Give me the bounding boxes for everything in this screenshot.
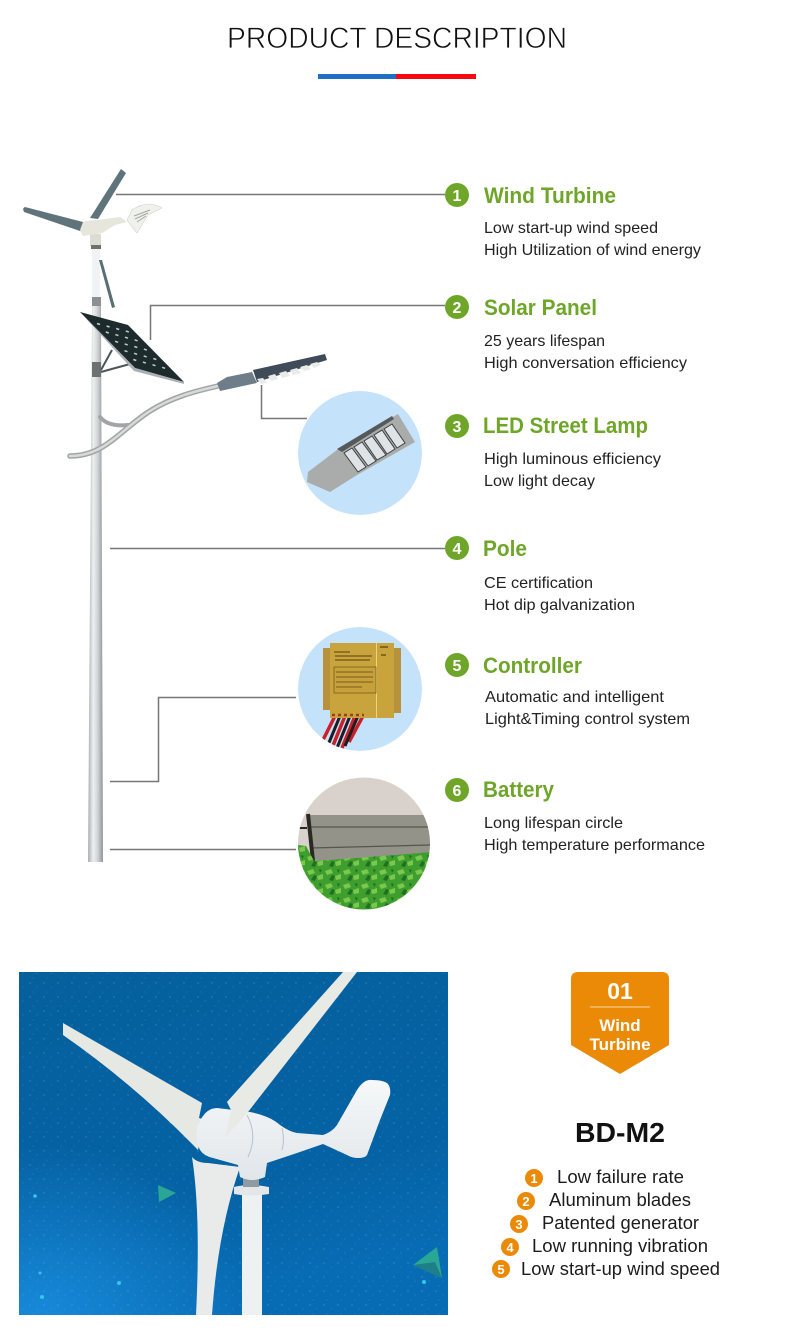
text: battery features: [484, 815, 705, 854]
badge label: Wind: [599, 1016, 641, 1035]
text: solar panel features: [484, 333, 687, 372]
feature list: [492, 1166, 720, 1279]
item 5: 5: [497, 1262, 505, 1277]
heading: wind turbine: Wind Turbine: [484, 183, 616, 208]
heading: LED street lamp: LED Street Lamp: [483, 413, 648, 438]
text: pole features: [484, 575, 635, 614]
text: controller features: [485, 689, 690, 728]
text: controller features: Light&Timing control system: [485, 711, 690, 728]
callout 5: controller: [298, 627, 690, 751]
title underline: [318, 74, 476, 79]
photo: LED lamp: [298, 391, 422, 515]
badge 4: [445, 536, 469, 560]
badge 1: 1: [453, 188, 462, 205]
lamp arm: [70, 386, 218, 456]
text: LED lamp features: [484, 451, 661, 490]
badge 3: 3: [453, 419, 462, 436]
street lamp head: [217, 354, 327, 391]
badge label: Turbine: [589, 1035, 651, 1054]
section badge: [571, 972, 669, 1074]
heading: pole: Pole: [483, 536, 527, 561]
callout 6: battery: [298, 777, 705, 910]
wind turbine: [23, 169, 162, 308]
text: battery features: High temperature performance: [484, 837, 705, 854]
item 2: Aluminum blades: [549, 1189, 691, 1210]
photo: controller: [298, 627, 422, 751]
leader lines: [110, 194, 445, 850]
callout 2: solar panel: [445, 295, 687, 372]
item 1: 1: [530, 1171, 538, 1186]
item 4: 4: [506, 1240, 514, 1255]
text: controller features: Automatic and intelligent: [485, 689, 665, 706]
badge 6: [445, 778, 469, 802]
callout 4: pole: [445, 536, 635, 614]
badge 2: [445, 295, 469, 319]
badge 2: 2: [453, 300, 462, 317]
text: wind turbine features: High Utilization of wind energy: [484, 242, 701, 259]
badge 4: 4: [453, 541, 462, 558]
pole: [88, 248, 103, 862]
heading: solar panel: Solar Panel: [484, 295, 597, 320]
item 2: 2: [522, 1194, 530, 1209]
item 3: 3: [515, 1217, 523, 1232]
text: wind turbine features: [484, 220, 701, 259]
callout 1: wind turbine: [445, 183, 701, 259]
badge 5: [445, 653, 469, 677]
text: wind turbine features: Low start-up wind speed: [484, 220, 658, 237]
item 1: Low failure rate: [557, 1166, 684, 1187]
heading: battery: Battery: [483, 777, 555, 802]
photo: battery: [298, 777, 431, 910]
item 5: Low start-up wind speed: [521, 1258, 720, 1279]
model heading: BD-M2: [575, 1117, 665, 1148]
text: battery features: Long lifespan circle: [484, 815, 623, 832]
text: solar panel features: 25 years lifespan: [484, 333, 605, 350]
badge 5: 5: [453, 658, 462, 675]
photo: wind turbine close-up: [19, 972, 448, 1315]
item 4: Low running vibration: [532, 1235, 708, 1256]
heading: controller: Controller: [483, 653, 582, 678]
title: PRODUCT DESCRIPTION: [227, 22, 567, 55]
text: solar panel features: High conversation efficiency: [484, 355, 687, 372]
callout 3: LED street lamp: [298, 391, 661, 515]
street light illustration: [23, 169, 327, 862]
item 3: Patented generator: [542, 1212, 699, 1233]
text: pole features: Hot dip galvanization: [484, 597, 635, 614]
text: LED lamp features: Low light decay: [484, 473, 595, 490]
text: pole features: CE certification: [484, 575, 593, 592]
badge 1: [445, 183, 469, 207]
badge 3: [445, 414, 469, 438]
badge 6: 6: [453, 783, 462, 800]
badge number: 01: [607, 978, 633, 1004]
solar panel: [80, 312, 184, 384]
text: LED lamp features: High luminous efficiency: [484, 451, 661, 468]
